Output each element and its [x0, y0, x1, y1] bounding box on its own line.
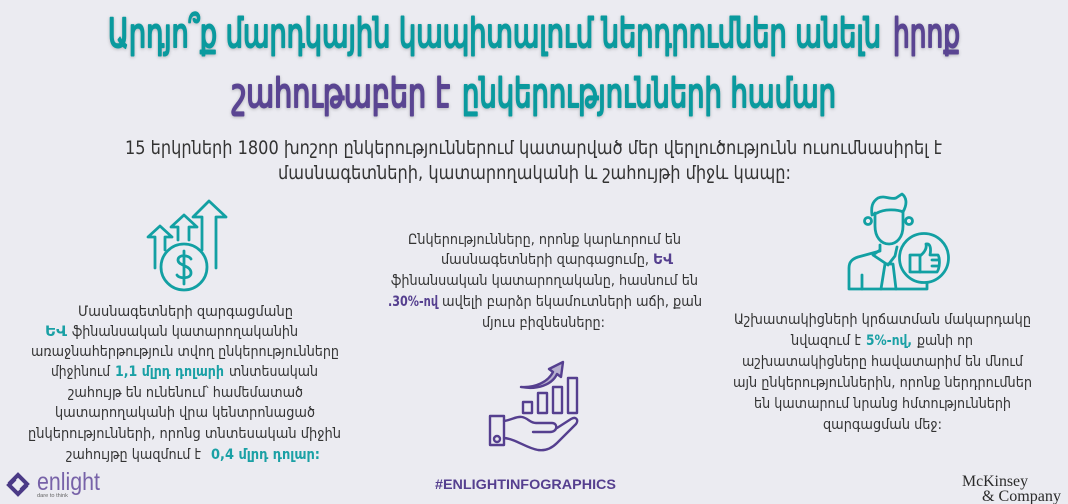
right text block: քանի որ: [917, 333, 973, 349]
right text block: [733, 312, 1032, 433]
left text block: 0,4 մլրդ դոլար:: [211, 447, 320, 463]
logo: enlight: dare to think: [37, 493, 69, 499]
logo: enlight: enlight: [37, 468, 100, 496]
title: շահութաբեր է: [232, 71, 450, 117]
center text block: ֆինանսական կատարողականը, հասնում են: [391, 273, 698, 289]
title: իրոք: [893, 11, 960, 57]
left text block: ընկերությունների, որոնց տնտեսական միջին: [28, 426, 341, 442]
icon: rising arrows and dollar coin: [148, 201, 226, 290]
center text block: մասնագետների զարգացումը,: [441, 252, 649, 268]
right text block: աշխատակիցները հավատարիմ են մնում: [742, 354, 1024, 370]
left text block: միջինում: [51, 364, 111, 380]
intro text: մասնագետների, կատարողականի և շահույթի միջև կապը:: [278, 162, 791, 184]
logo: McKinsey & Company: [962, 473, 1061, 504]
right text block: նվազում է: [790, 333, 861, 349]
center text block: Ընկերությունները, որոնք կարևորում են: [408, 232, 681, 248]
intro text: 15 երկրների 1800 խոշոր ընկերություններում կատարված մեր վերլուծությունն ուսումնասիրել է: [125, 137, 942, 159]
left text block: տնտեսական: [229, 364, 318, 380]
right text block: զարգացման մեջ:: [823, 417, 942, 433]
icon: employee with thumbs up: [849, 194, 948, 289]
left text block: Մասնագետների զարգացմանը: [78, 304, 293, 320]
intro text: [125, 137, 942, 184]
title: ընկերությունների համար: [462, 71, 836, 117]
left text block: շահույթ են ունենում՝ համեմատած: [68, 385, 303, 401]
logo: McKinsey & Company: McKinsey: [962, 473, 1028, 490]
left text block: շահույթը կազմում է: [66, 447, 201, 463]
right text block: 5%-ով,: [866, 333, 912, 349]
left text block: 1,1 մլրդ դոլարի: [115, 364, 224, 380]
right text block: այն ընկերություններին, որոնք ներդրումներ: [733, 375, 1032, 391]
center text block: [388, 232, 702, 331]
center text block: ավելի բարձր եկամուտների աճի, քան: [442, 294, 702, 310]
left text block: կատարողականի վրա կենտրոնացած: [55, 405, 315, 421]
icon: hand holding growth chart: [490, 362, 577, 450]
right text block: են կատարում նրանց հմտությունների: [754, 396, 1011, 412]
center text block: .30%-ով: [388, 294, 439, 310]
left text block: ԵՎ: [45, 324, 68, 340]
title: [108, 11, 960, 117]
right text block: Աշխատակիցների կրճատման մակարդակը: [734, 312, 1031, 328]
center text block: մյուս բիզնեսները:: [482, 315, 605, 331]
left text block: [28, 304, 341, 463]
logo: enlight: [9, 468, 100, 499]
left text block: ֆինանսական կատարողականին: [72, 324, 298, 340]
center text block: ԵՎ: [653, 252, 674, 268]
hashtag: #ENLIGHTINFOGRAPHICS: [435, 476, 616, 492]
left text block: առաջնահերթություն տվող ընկերությունները: [31, 344, 339, 360]
